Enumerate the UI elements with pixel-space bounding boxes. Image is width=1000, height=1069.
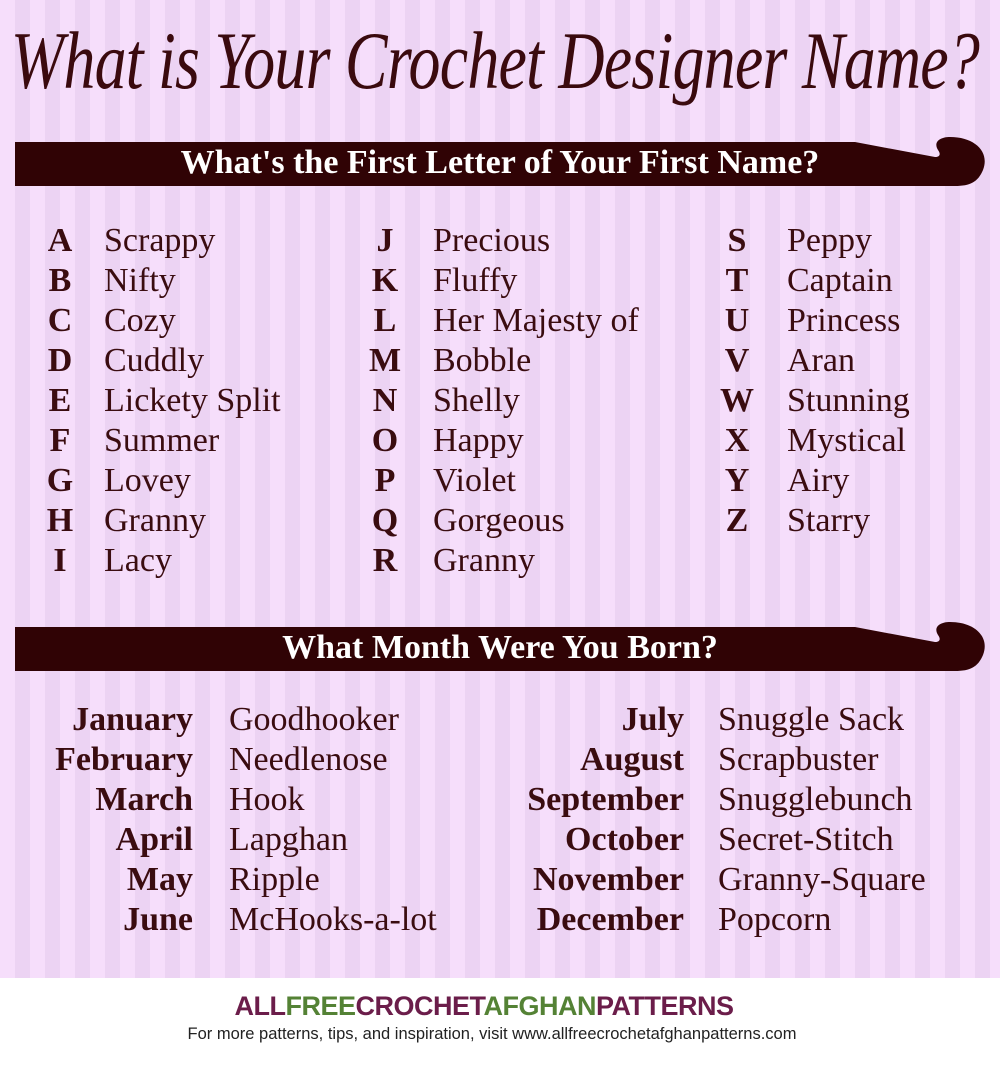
letters column 1: Summer [104, 422, 219, 459]
letters column 3: Princess [787, 302, 900, 339]
letters column 1: F [50, 422, 70, 459]
letters column 2: Bobble [433, 342, 531, 379]
letters column 1: Scrappy [104, 222, 215, 259]
months right: Scrapbuster [718, 741, 879, 778]
letters column 1: G [47, 462, 73, 499]
months right: October [565, 821, 684, 858]
months left [55, 701, 437, 938]
months left: February [55, 741, 193, 778]
letters column 2: Violet [433, 462, 516, 499]
letters column 1: A [48, 222, 72, 259]
months right: Granny-Square [718, 861, 926, 898]
footer [188, 991, 796, 1043]
letters column 1: Lovey [104, 462, 191, 499]
letters column 3 [720, 222, 910, 539]
letters column 1: B [49, 262, 71, 299]
letters column 3: W [720, 382, 754, 419]
letters column 2: P [375, 462, 395, 499]
letters column 2 [369, 222, 639, 579]
letters column 2: Gorgeous [433, 502, 565, 539]
letters column 1: Nifty [104, 262, 176, 299]
months left: March [95, 781, 193, 818]
letters column 1: C [48, 302, 72, 339]
letters column 2: O [372, 422, 398, 459]
months left: Lapghan [229, 821, 348, 858]
letters column 1: Cozy [104, 302, 176, 339]
letters column 3: Captain [787, 262, 893, 299]
banner: month [15, 622, 985, 671]
months right [527, 701, 926, 938]
letters column 3: Y [725, 462, 749, 499]
letters column 2: R [373, 542, 397, 579]
months right: Popcorn [718, 901, 831, 938]
letters column 1: Lacy [104, 542, 172, 579]
months left: January [72, 701, 193, 738]
months left: Ripple [229, 861, 320, 898]
letters column 1: E [49, 382, 71, 419]
months right: Snuggle Sack [718, 701, 904, 738]
letters column 3: Mystical [787, 422, 906, 459]
letters column 2: Precious [433, 222, 550, 259]
letters column 1: Granny [104, 502, 206, 539]
banner: month: What Month Were You Born? [282, 629, 718, 666]
letters column 2: Granny [433, 542, 535, 579]
months left: Goodhooker [229, 701, 399, 738]
letters column 2: Her Majesty of [433, 302, 639, 339]
title: What is Your Crochet Designer Name? [11, 15, 979, 106]
letters column 3: Starry [787, 502, 870, 539]
letters column 3: S [728, 222, 746, 259]
banner: first letter [15, 137, 985, 186]
letters column 1: D [48, 342, 72, 379]
letters column 1: H [47, 502, 73, 539]
letters column 3: Z [726, 502, 748, 539]
months left: Needlenose [229, 741, 388, 778]
letters column 3: T [726, 262, 748, 299]
footer text: For more patterns, tips, and inspiration, visit www.allfreecrochetafghanpatterns.com [188, 1025, 796, 1043]
months right: Snugglebunch [718, 781, 913, 818]
letters column 2: Shelly [433, 382, 520, 419]
letters column 1 [47, 222, 281, 579]
letters column 3: Peppy [787, 222, 872, 259]
letters column 2: K [372, 262, 398, 299]
letters column 3: X [725, 422, 749, 459]
letters column 1: Cuddly [104, 342, 204, 379]
months right: Secret-Stitch [718, 821, 894, 858]
months right: September [527, 781, 684, 818]
months right: July [622, 701, 684, 738]
months right: December [537, 901, 684, 938]
footer logo: ALLFREECROCHETAFGHANPATTERNS [234, 991, 734, 1021]
letters column 1: I [53, 542, 67, 579]
letters column 2: N [373, 382, 397, 419]
letters column 3: U [725, 302, 749, 339]
letters column 3: Stunning [787, 382, 910, 419]
months left: May [127, 861, 193, 898]
months left: April [116, 821, 193, 858]
letters column 2: J [376, 222, 394, 259]
letters column 2: L [374, 302, 396, 339]
months left: Hook [229, 781, 305, 818]
letters column 3: Aran [787, 342, 855, 379]
letters column 2: Q [372, 502, 398, 539]
months right: August [580, 741, 684, 778]
letters column 2: Fluffy [433, 262, 517, 299]
letters column 3: Airy [787, 462, 849, 499]
letters column 2: Happy [433, 422, 524, 459]
months left: McHooks-a-lot [229, 901, 437, 938]
letters column 1: Lickety Split [104, 382, 281, 419]
months right: November [533, 861, 684, 898]
months left: June [123, 901, 193, 938]
banner: first letter: What's the First Letter of Your First Name? [181, 144, 819, 181]
letters column 3: V [725, 342, 749, 379]
letters column 2: M [369, 342, 401, 379]
